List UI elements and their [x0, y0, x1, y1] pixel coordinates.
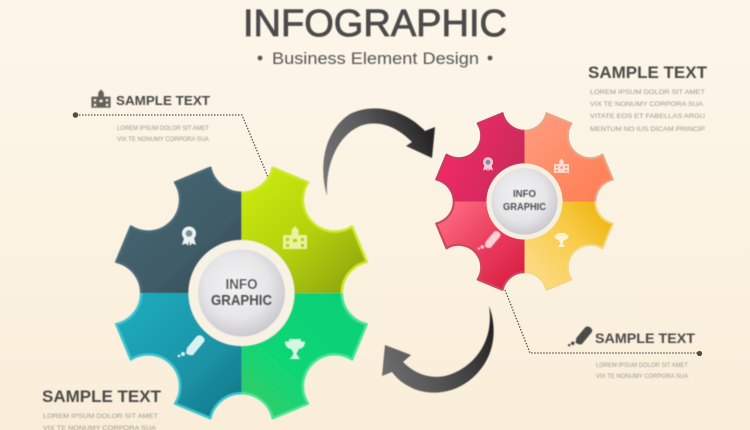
callout: top right sample text: VITATE EOS ET FABELLAS ARGU: [590, 113, 705, 120]
callout: top right sample text: [588, 64, 707, 133]
icon: medal: [182, 226, 196, 246]
small hub label: INFO: [513, 188, 536, 200]
callout: top left sample text: SAMPLE TEXT: [116, 94, 210, 108]
callout: bottom right sample text: SAMPLE TEXT: [595, 331, 696, 346]
hub label second line: GRAPHIC: [211, 292, 272, 309]
callout: top left sample text: [91, 89, 210, 143]
segment: teal: [114, 292, 242, 420]
arrow: bottom curved: [382, 306, 494, 393]
segment: crimson: [435, 112, 524, 202]
segment: rose: [435, 202, 524, 291]
callout: top left sample text: LOREM IPSUM DOLOR SIT AMET: [117, 125, 209, 132]
title: INFOGRAPHIC: [243, 3, 507, 45]
segment: slate: [114, 166, 242, 294]
hub ring: [188, 240, 294, 346]
callout: bottom right sample text: LOREM IPSUM DOLOR SIT AMET: [596, 362, 688, 369]
small hub label: GRAPHIC: [503, 201, 546, 213]
small gear: [436, 113, 613, 290]
icon: building dark: [91, 89, 111, 108]
callout line: top left: [73, 112, 278, 201]
segment: green: [240, 292, 369, 420]
icon: brush dark: [568, 326, 592, 346]
segment: coral: [524, 112, 614, 202]
hub disc: [198, 250, 285, 336]
callout: top right sample text: LOREM IPSUM DOLOR SIT AMET: [590, 89, 705, 96]
icon: brush: [178, 335, 205, 357]
arrow: top curved: [323, 108, 435, 196]
callout: bottom left sample text: [42, 388, 161, 430]
callout: top right sample text: VIX TE NONUMY CORPORA SUA: [590, 101, 704, 108]
callout: top left sample text: VIX TE NONUMY CORPORA SUA: [117, 136, 210, 143]
segment: lime: [240, 166, 369, 294]
small hub label: [503, 188, 546, 213]
callout: bottom right line: [505, 290, 702, 356]
hub label: INFO: [226, 276, 258, 293]
callout: bottom right sample text: [568, 326, 696, 380]
callout: bottom left sample text: LOREM IPSUM DOLOR SIT AMET: [43, 413, 158, 420]
subtitle: Business Element Design: [272, 50, 479, 68]
callout: bottom right sample text: VIX TE NONUMY CORPORA SUA: [596, 373, 689, 380]
callout: top right sample text: MENTUM NO IUS DICAM PRINCIP: [590, 126, 705, 133]
callout: bottom left sample text: SAMPLE TEXT: [42, 388, 161, 406]
large gear: [116, 168, 367, 418]
icon: building: [283, 226, 307, 249]
icon: trophy: [285, 339, 305, 359]
segment: yellow: [524, 202, 614, 291]
hub ring: [486, 163, 563, 240]
callout: top right sample text: SAMPLE TEXT: [588, 64, 707, 82]
icon: small building: [554, 159, 569, 173]
icon: small brush: [478, 231, 501, 250]
icon: small medal: [483, 157, 493, 171]
hub disc: [491, 168, 558, 235]
icon: small trophy: [554, 233, 568, 247]
